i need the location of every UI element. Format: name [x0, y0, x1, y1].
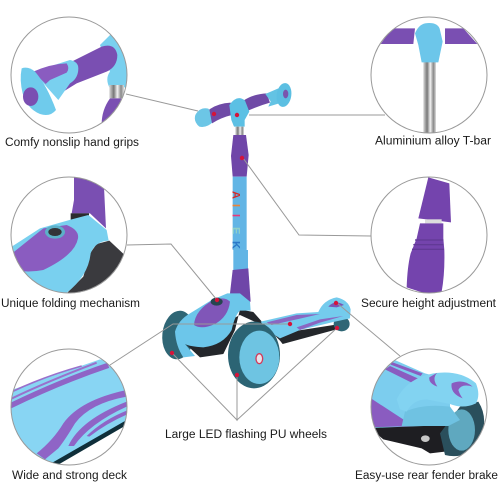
circle outline — [11, 349, 127, 465]
panel: rear fender brake — [355, 349, 498, 482]
panel: height adjustment — [361, 177, 497, 310]
panel: deck — [7, 347, 133, 482]
caption: Wide and strong deck — [12, 470, 127, 482]
caption: Comfy nonslip hand grips — [5, 137, 139, 149]
red marker dots — [170, 112, 339, 377]
leader line: folding mechanism — [127, 244, 217, 300]
caption: Secure height adjustment — [361, 298, 497, 310]
panel: hand grips — [5, 17, 139, 149]
height adjustment detail — [407, 177, 451, 295]
scooter stem logo: A — [230, 191, 242, 199]
leader line: T-bar — [249, 114, 385, 116]
hand grip detail — [21, 33, 130, 124]
scooter stem logo: K — [230, 241, 242, 249]
circle outline — [371, 17, 487, 133]
circle outline — [11, 17, 127, 133]
panel: T-bar — [371, 17, 491, 148]
scooter stem logo — [230, 191, 242, 249]
scooter stem logo: I — [230, 214, 242, 217]
circle outline — [371, 177, 487, 293]
scooter handlebar — [195, 82, 293, 250]
circle outline — [11, 177, 127, 293]
leader lines: wheels — [172, 328, 337, 420]
caption: Easy-use rear fender brake — [355, 470, 498, 482]
scooter base — [160, 250, 351, 388]
leader line: deck — [110, 324, 290, 365]
T-bar detail — [381, 23, 477, 137]
panel: folding mechanism — [1, 175, 140, 310]
rear fender brake detail — [367, 359, 484, 456]
caption: Unique folding mechanism — [1, 298, 140, 310]
circle outline — [371, 349, 487, 465]
leader line: rear brake — [337, 303, 400, 356]
caption: wheels: Large LED flashing PU wheels — [165, 429, 327, 441]
scooter stem logo: E — [230, 227, 242, 234]
scooter illustration — [160, 82, 351, 388]
scooter stem logo: I — [230, 204, 242, 207]
leader line: hand grips — [126, 94, 198, 111]
leader line: height adjustment — [243, 158, 371, 236]
deck detail — [12, 359, 126, 464]
caption: Aluminium alloy T-bar — [375, 136, 491, 148]
folding mechanism detail — [12, 178, 124, 292]
